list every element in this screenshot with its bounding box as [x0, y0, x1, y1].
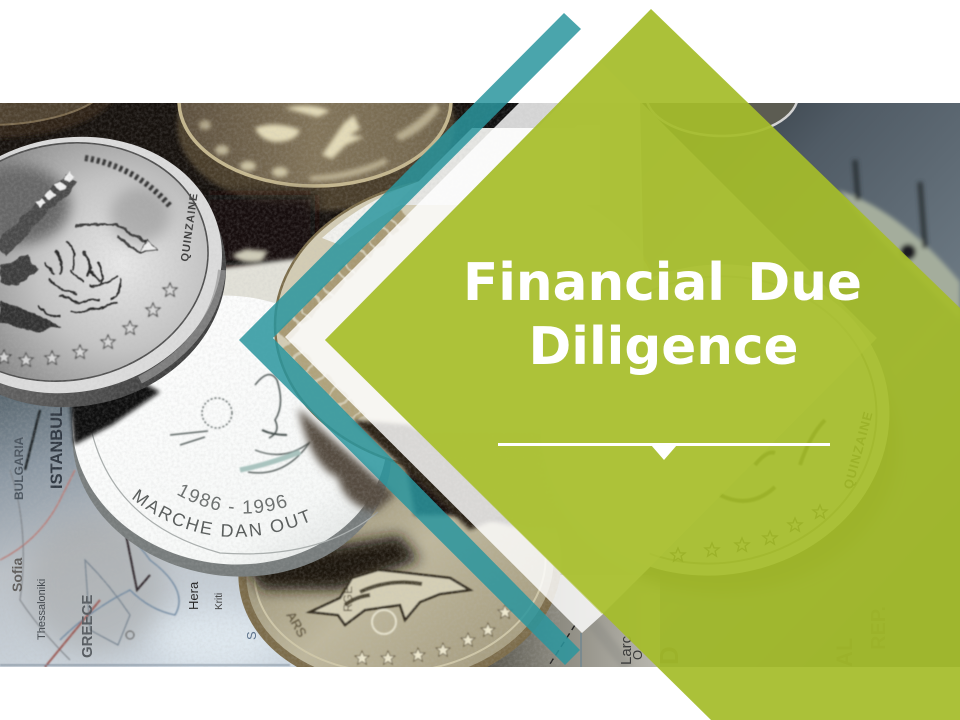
title: Diligence: [528, 317, 799, 377]
background photo: coins on a map: [0, 103, 960, 667]
shadow and paper between the coins: [222, 184, 323, 304]
map: lower left: S: [244, 631, 259, 640]
shadow under the left silver coin: [70, 378, 160, 445]
green panel: [325, 9, 960, 720]
coin: top bronze: [175, 103, 457, 213]
map: lower left: GREECE: [79, 595, 96, 658]
map: lower left: BULGARIA: [12, 436, 26, 500]
coin: top left bronze: [0, 103, 112, 138]
map: lower left: Sofia: [9, 558, 25, 592]
coin and map under the green overlay: REP.: [868, 606, 890, 650]
coin and map under the green overlay: [651, 344, 890, 576]
coin: left silver: [0, 136, 226, 408]
divider line with pointer: [498, 443, 830, 460]
map: lower left: Kriti: [214, 593, 225, 610]
inner lighter diamond: [325, 63, 877, 614]
map: lower middle: Larc: [618, 635, 635, 665]
coin reflection beside the head: [298, 408, 395, 512]
title: Financial Due: [463, 253, 862, 313]
map: lower left: ISTANBUL: [48, 407, 66, 489]
metallic grain over the coins: [0, 103, 560, 667]
teal chevron: [239, 13, 581, 665]
coin and map under the green overlay: D: [654, 646, 684, 665]
coin and map under the green overlay: AL: [832, 638, 857, 667]
coin: bottom bronze: RGE: [341, 586, 355, 612]
coin: left silver: QUINZAINE: [179, 192, 201, 262]
map: lower middle: O: [630, 650, 645, 660]
map: lower left: Hera: [186, 581, 201, 610]
map: lower left: [0, 395, 297, 667]
coin inscription: year: 1986 - 1996: [177, 484, 286, 514]
coin and map under the green overlay: QUINZAINE: [840, 409, 876, 491]
map: right side: [640, 54, 960, 667]
coin: right coin behind the bands: [274, 125, 534, 528]
map: lower left: Thessaloniki: [36, 579, 48, 640]
coin: bottom bronze: [238, 462, 560, 667]
dark gap between teal and white bands: [352, 420, 505, 530]
coin: bottom bronze: ARS: [283, 609, 310, 640]
map: lower middle: [488, 575, 658, 667]
coin: bright silver 1986-1996: [72, 296, 390, 577]
coin inscription: name: MARCHE DAN OUT: [132, 489, 308, 538]
translucent white chevron: [285, 22, 650, 633]
